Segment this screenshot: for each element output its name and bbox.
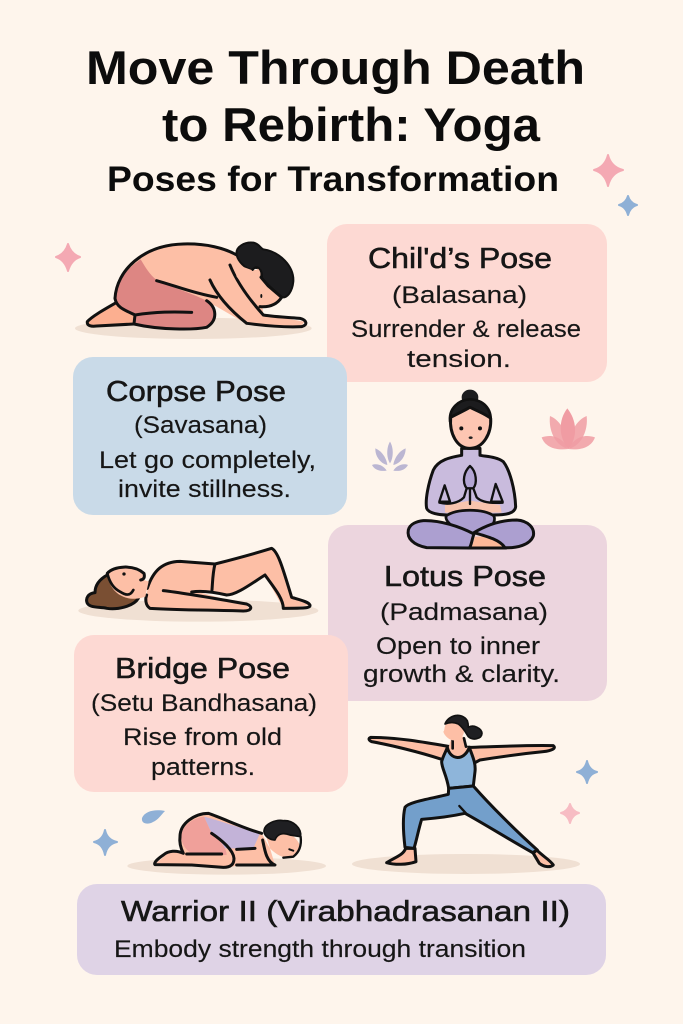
leggings [403, 786, 537, 853]
title: Poses for Transformation [107, 160, 559, 199]
icon: pink lotus flower [542, 408, 595, 449]
description: corpse pose: invite stillness. [118, 476, 291, 503]
icon: bridge pose figure [78, 548, 318, 622]
description: child's pose: tension. [407, 346, 511, 373]
title: to Rebirth: Yoga [162, 98, 541, 151]
icon: lavender flower [372, 442, 408, 471]
panel: bridge pose [74, 635, 348, 792]
panel: child's pose [327, 224, 607, 382]
heading: warrior II: Warrior II (Virabhadrasanan II) [121, 896, 570, 928]
icon: blue sparkle right [577, 761, 597, 783]
panel: corpse pose [73, 357, 347, 515]
heading: child's pose: Chil'd’s Pose [368, 243, 552, 275]
panel: lotus pose [328, 525, 607, 701]
description: bridge pose: Rise from old [123, 724, 282, 751]
sanskrit name: setu bandhasana: (Setu Bandhasana) [91, 690, 317, 717]
sanskrit name: padmasana: (Padmasana) [380, 599, 548, 626]
icon: blue sparkle top right [619, 196, 637, 215]
icon: pink sparkle left [56, 244, 80, 271]
description: lotus pose: Open to inner [376, 633, 540, 660]
heading: bridge pose: Bridge Pose [115, 653, 290, 685]
title: Move Through Death [86, 41, 585, 94]
icon: warrior II figure [352, 715, 580, 874]
description: child's pose: Surrender & release [351, 316, 581, 343]
icon: child's pose figure [75, 243, 312, 339]
description: warrior II: Embody strength through transition [114, 936, 526, 963]
sanskrit name: savasana: (Savasana) [134, 412, 267, 439]
panel: warrior II [77, 884, 606, 975]
heading: corpse pose: Corpse Pose [106, 376, 286, 408]
arms [369, 737, 554, 764]
heading: lotus pose: Lotus Pose [384, 561, 546, 593]
head [443, 723, 464, 740]
tank top [442, 747, 475, 788]
description: bridge pose: patterns. [151, 754, 255, 781]
title [86, 41, 585, 199]
description: corpse pose: Let go completely, [99, 447, 316, 474]
icon: blue leaf drop [142, 810, 165, 824]
icon: pink sparkle right [561, 804, 579, 823]
neck [448, 737, 468, 757]
feet [387, 848, 416, 864]
icon: pink sparkle top right [594, 155, 623, 186]
hair [445, 715, 482, 739]
icon: bridge variation figure [127, 813, 326, 875]
description: lotus pose: growth & clarity. [363, 661, 560, 688]
icon: blue sparkle bottom left [94, 830, 117, 855]
sanskrit name: balasana: (Balasana) [392, 282, 527, 309]
icon: lotus pose figure [408, 390, 534, 548]
